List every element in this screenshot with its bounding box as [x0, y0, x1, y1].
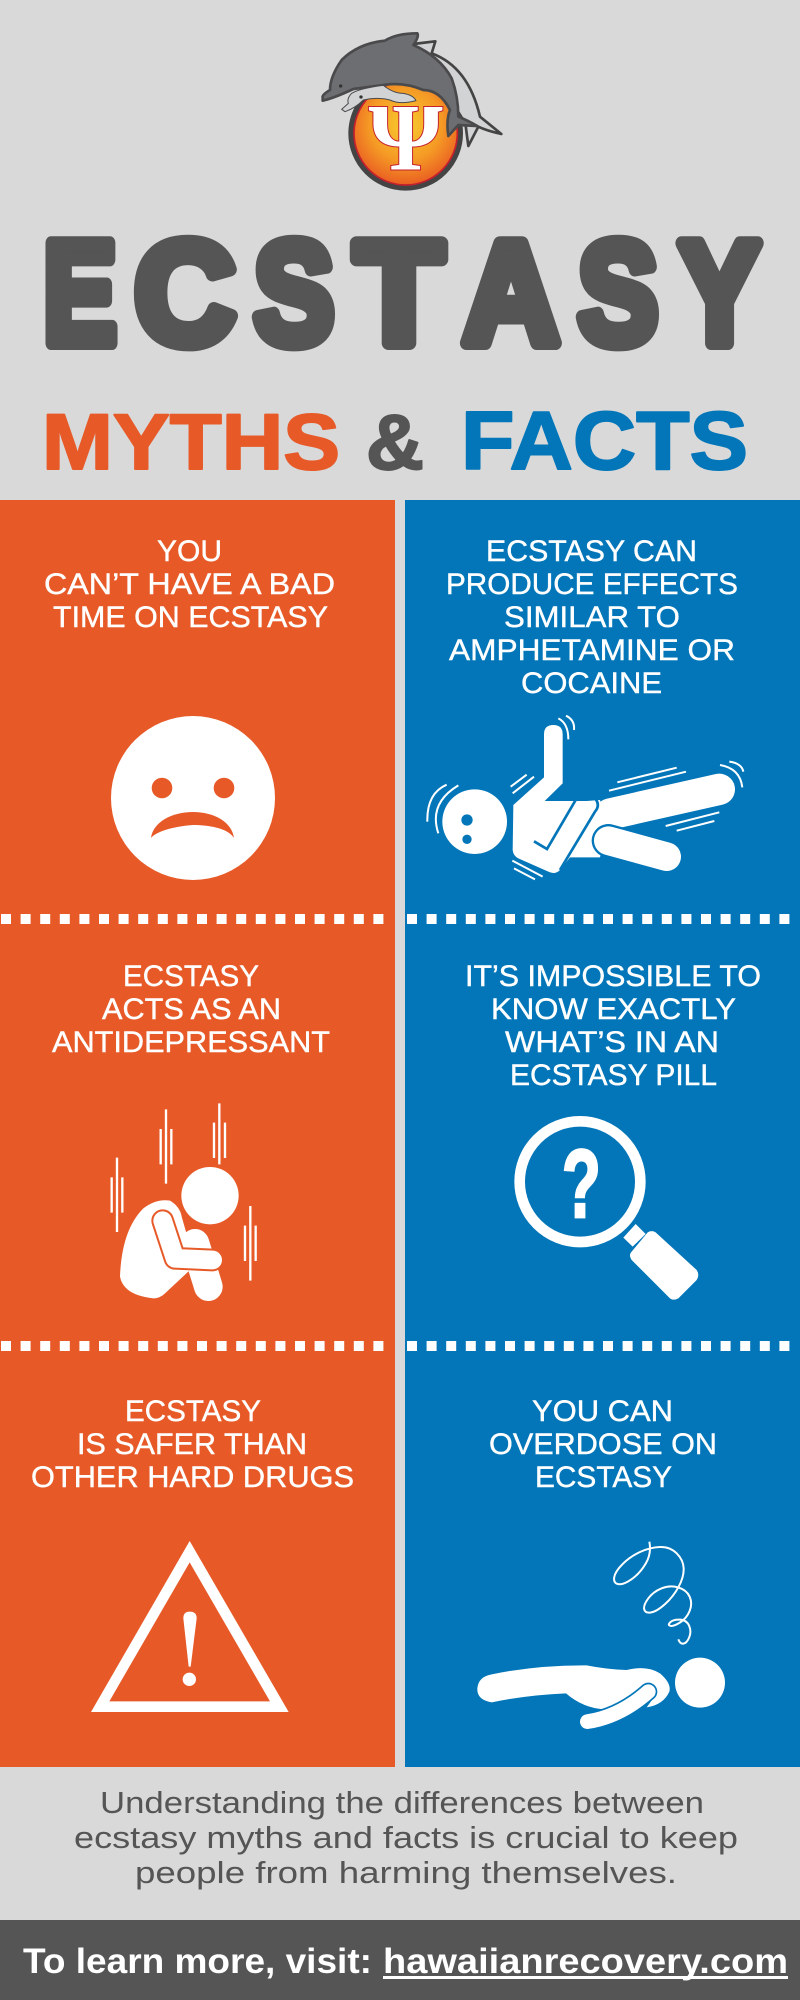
- heading: fact 1: AMPHETAMINE OR: [449, 634, 735, 667]
- closing statement: Understanding the differences between: [100, 1785, 704, 1820]
- heading: fact 1: SIMILAR TO: [504, 601, 680, 634]
- heading: fact 1: [446, 535, 738, 700]
- heading: myth 2: [52, 960, 330, 1059]
- logo: dolphin and psi emblem: [323, 33, 501, 190]
- heading: fact 1: ECSTASY CAN: [486, 535, 697, 568]
- title: ECSTASY: C: [135, 212, 235, 375]
- heading: myth 3: [31, 1395, 354, 1494]
- footer call to action: To learn more, visit:: [23, 1942, 372, 1981]
- icon: person collapsed from overdose: [477, 1542, 725, 1722]
- footer call to action: [23, 1942, 788, 1981]
- heading: myth 2: ANTIDEPRESSANT: [52, 1026, 330, 1059]
- heading: fact 2: IT’S IMPOSSIBLE TO: [465, 960, 761, 993]
- fact card 1: [427, 535, 743, 879]
- myth card 2: [52, 960, 330, 1298]
- footer bar: [0, 1920, 800, 2000]
- subtitle: myths and facts: MYTHS: [42, 397, 340, 486]
- footer call to action: hawaiianrecovery.com: [383, 1942, 788, 1981]
- heading: fact 2: [465, 960, 761, 1092]
- heading: fact 2: WHAT’S IN AN: [505, 1026, 719, 1059]
- title: ECSTASY: [43, 211, 760, 375]
- fact card 3: [477, 1395, 725, 1722]
- heading: fact 3: YOU CAN: [532, 1395, 673, 1428]
- heading: fact 2: ECSTASY PILL: [510, 1059, 717, 1092]
- logo: dolphin and psi emblem: Ψ: [369, 84, 443, 190]
- closing statement: ecstasy myths and facts is crucial to keep: [74, 1820, 738, 1855]
- myth card 1: [44, 535, 335, 880]
- heading: myth 2: ECSTASY: [123, 960, 259, 993]
- closing statement: [74, 1785, 738, 1890]
- icon: warning triangle: [91, 1541, 289, 1712]
- heading: fact 3: OVERDOSE ON: [489, 1428, 717, 1461]
- subtitle: myths and facts: &: [366, 398, 424, 486]
- icon: person having a seizure: [427, 716, 743, 879]
- panel: myths column: [0, 500, 395, 1767]
- heading: fact 2: KNOW EXACTLY: [491, 993, 736, 1026]
- title: ECSTASY: A: [463, 213, 559, 374]
- closing statement: people from harming themselves.: [135, 1855, 677, 1890]
- myth card 3: [31, 1395, 354, 1712]
- heading: fact 1: COCAINE: [521, 667, 662, 700]
- subtitle: myths and facts: FACTS: [461, 394, 748, 487]
- title: ECSTASY: T: [355, 211, 443, 374]
- panel: facts column: [405, 500, 800, 1767]
- title: ECSTASY: Y: [679, 213, 760, 374]
- heading: myth 1: YOU: [157, 535, 222, 568]
- heading: myth 3: ECSTASY: [125, 1395, 261, 1428]
- icon: sad face: [111, 716, 275, 880]
- title: ECSTASY: S: [254, 213, 334, 375]
- fact card 2: [465, 960, 761, 1300]
- heading: myth 1: CAN’T HAVE A BAD: [44, 568, 335, 601]
- title: ECSTASY: E: [43, 213, 117, 375]
- icon: magnifying glass with question mark: ?: [562, 1131, 601, 1238]
- title: ECSTASY: S: [578, 213, 658, 375]
- icon: person curled up in depression: [112, 1103, 256, 1298]
- icon: magnifying glass with question mark: [520, 1121, 698, 1300]
- heading: myth 1: TIME ON ECSTASY: [53, 601, 328, 634]
- heading: fact 1: PRODUCE EFFECTS: [446, 568, 738, 601]
- heading: myth 2: ACTS AS AN: [102, 993, 281, 1026]
- heading: myth 3: IS SAFER THAN: [77, 1428, 307, 1461]
- subtitle: myths and facts: [42, 394, 748, 487]
- heading: myth 1: [44, 535, 335, 634]
- heading: fact 3: [489, 1395, 717, 1494]
- heading: myth 3: OTHER HARD DRUGS: [31, 1461, 354, 1494]
- heading: fact 3: ECSTASY: [535, 1461, 672, 1494]
